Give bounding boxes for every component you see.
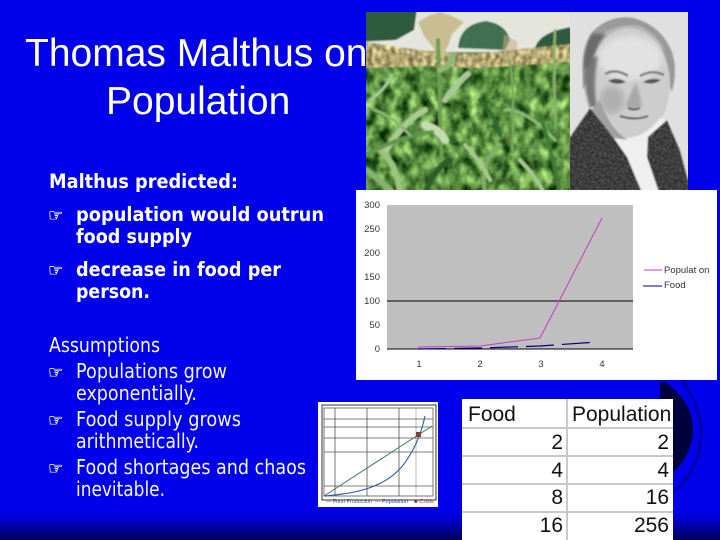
x axis labels: 1 <box>416 359 422 370</box>
legend: Populat on <box>664 265 709 276</box>
text block: Malthus predicted: food supply <box>76 225 192 248</box>
line chart panel <box>356 190 717 380</box>
y axis labels: 300 <box>364 200 380 211</box>
text block: Malthus predicted: person. <box>76 280 150 303</box>
text block: Malthus predicted: population would outrun <box>76 203 324 226</box>
x axis labels: 3 <box>538 359 544 370</box>
y axis labels: 50 <box>369 320 380 331</box>
text block: assumptions: exponentially. <box>76 381 197 405</box>
text block: assumptions: Food shortages and chaos <box>76 455 306 479</box>
y axis labels: 200 <box>364 248 380 259</box>
text block: assumptions: ☞ <box>48 411 63 431</box>
photo: portrait of Thomas Malthus <box>570 12 688 190</box>
photo: corn field <box>366 12 570 190</box>
y axis labels: 150 <box>364 272 380 283</box>
text block: assumptions: inevitable. <box>76 477 165 501</box>
title <box>25 32 368 123</box>
population curve <box>324 416 425 496</box>
small graph legend <box>326 499 434 505</box>
text block: Malthus predicted: decrease in food per <box>76 258 281 281</box>
text block: Malthus predicted: Malthus predicted: <box>49 170 238 193</box>
data table: food and population: 256 <box>634 514 669 537</box>
food production line <box>324 426 432 496</box>
data table: food and population: 4 <box>657 459 669 482</box>
data table: food and population: 2 <box>551 431 563 454</box>
text block: assumptions: Populations grow <box>76 359 227 383</box>
data table: food and population: 8 <box>551 486 563 509</box>
y axis labels: 250 <box>364 224 380 235</box>
data table: food and population: Population <box>572 403 671 426</box>
decorative swirl, bottom right <box>660 380 701 492</box>
data table: food and population: Food <box>468 403 516 426</box>
text block: assumptions: ☞ <box>48 459 63 479</box>
data table: food and population: 16 <box>540 514 563 537</box>
x axis labels <box>416 359 605 370</box>
data table: food and population <box>462 399 673 540</box>
text block: assumptions: Assumptions <box>49 333 160 357</box>
small graph legend: — Food Production <box>326 499 372 505</box>
text block: assumptions: ☞ <box>48 363 63 383</box>
text block: Malthus predicted: ☞ <box>48 261 63 281</box>
food line <box>418 342 597 349</box>
y axis labels: 100 <box>364 296 380 307</box>
x axis labels: 4 <box>599 359 605 370</box>
text block: assumptions <box>48 333 306 501</box>
x axis labels: 2 <box>477 359 483 370</box>
text block: Malthus predicted: ☞ <box>48 206 63 226</box>
small graph legend: — Population <box>375 499 408 505</box>
title: Population <box>106 80 290 123</box>
data table: food and population: 16 <box>646 486 669 509</box>
plot area <box>387 205 633 349</box>
small graph legend: ■ Crisis <box>414 499 434 505</box>
small graph: food production vs population <box>318 402 438 507</box>
title: Thomas Malthus on <box>25 32 368 75</box>
data table: food and population: 2 <box>657 431 669 454</box>
crisis marker <box>416 432 421 437</box>
text block: assumptions: arithmetically. <box>76 429 199 453</box>
y axis labels <box>364 200 380 355</box>
legend <box>643 265 709 291</box>
legend: Food <box>664 280 686 291</box>
y axis labels: 0 <box>375 344 380 355</box>
text block: assumptions: Food supply grows <box>76 407 241 431</box>
text block: Malthus predicted <box>48 170 324 303</box>
population line <box>418 218 602 347</box>
data table: food and population: 4 <box>551 459 563 482</box>
